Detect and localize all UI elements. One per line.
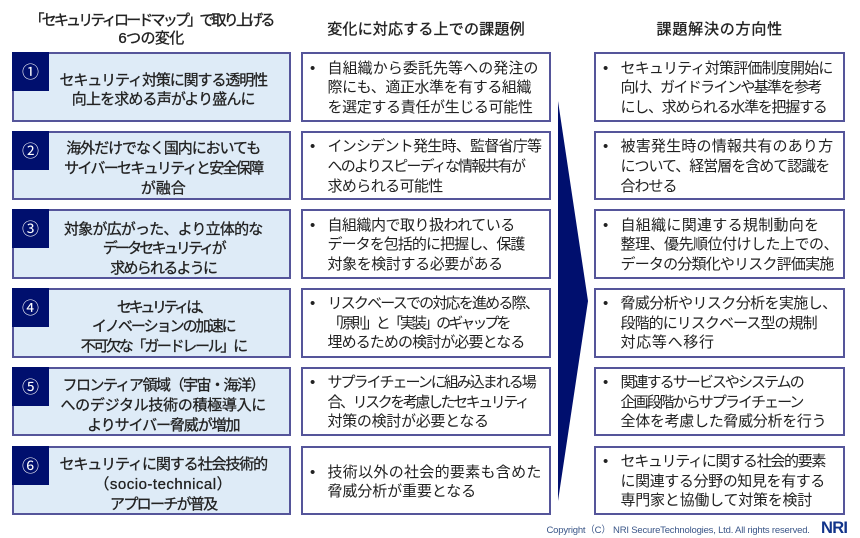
panel: solution 1: • [603, 60, 608, 76]
panel: challenge 2: へのよりスピーディな情報共有が [328, 158, 524, 175]
panel: challenge 4: • [310, 295, 315, 312]
panel: challenge 1: • [310, 60, 315, 76]
heading: solution direction: 課題解決の方向性 [657, 21, 783, 38]
panel: change 4: セキュリティは、 [117, 298, 210, 316]
panel: challenge 1: を選定する責任が生じる可能性 [328, 99, 532, 116]
panel: change 3: 対象が広がった、より立体的な [64, 220, 262, 238]
panel: solution 2: について、経営層を含めて認識を [620, 158, 829, 175]
panel: challenge 4: 「原則」と「実装」のギャップを [328, 315, 509, 332]
panel: challenge 2: 求められる可能性 [328, 178, 443, 195]
panel: solution 5: 企画段階からサプライチェーン [620, 394, 802, 411]
panel: solution 1: にし、求められる水準を把握する [620, 99, 826, 116]
panel: solution 4: • [603, 295, 608, 312]
panel: change 6 [12, 446, 290, 515]
panel: change 4 [12, 288, 290, 358]
panel: solution 5: • [603, 374, 608, 391]
panel: challenge 5: 合、リスクを考慮したセキュリティ [328, 394, 528, 411]
panel: challenge 3: データを包括的に把握し、保護 [328, 236, 524, 253]
panel: solution 4: 脅威分析やリスク分析を実施し、 [620, 295, 837, 312]
arrow: flow to solutions [558, 101, 588, 501]
panel: change 6: アプローチが普及 [110, 496, 216, 513]
panel: solution 5: 全体を考慮した脅威分析を行う [620, 413, 826, 430]
panel: solution 6 [594, 446, 845, 515]
heading: six changes [29, 12, 274, 47]
panel: solution 1 [594, 52, 845, 122]
panel: change 1 [12, 52, 290, 122]
panel: change 3: 求められるように [110, 260, 216, 277]
panel: change 4: 不可欠な「ガードレール」に [81, 338, 246, 355]
panel: solution 6: に関連する分野の知見を有する [620, 473, 825, 490]
heading: challenges: 変化に対応する上での課題例 [327, 21, 525, 38]
panel: change 1: ① [22, 63, 39, 82]
panel: change 3: データセキュリティが [103, 240, 224, 257]
panel: solution 3: • [603, 216, 608, 234]
panel: challenge 6 [301, 446, 551, 515]
panel: change 6: （socio-technical） [94, 476, 232, 493]
panel: solution 4: 段階的にリスクベース型の規制 [620, 315, 817, 332]
panel: challenge 6: 技術以外の社会的要素も含めた [328, 464, 542, 480]
panel: change 4: ④ [22, 299, 39, 318]
panel: challenge 4 [301, 288, 551, 358]
panel: change 2: ② [22, 142, 39, 160]
panel: challenge 2: インシデント発生時、監督省庁等 [328, 138, 541, 155]
panel: solution 2: • [603, 138, 608, 155]
panel: challenge 4: 埋めるための検討が必要となる [328, 334, 524, 351]
panel: change 2: 海外だけでなく国内においても [66, 140, 260, 157]
panel: change 5: よりサイバー脅威が増加 [87, 417, 239, 434]
panel: solution 1: 向け、ガイドラインや基準を参考 [620, 79, 821, 96]
panel: change 4: イノベーションの加速に [92, 318, 235, 335]
panel: solution 3: 自組織に関連する規制動向を [620, 216, 819, 234]
panel: solution 2: 被害発生時の情報共有のあり方 [620, 138, 833, 155]
panel: change 2: サイバーセキュリティと安全保障 [64, 160, 262, 177]
panel: solution 4: 対応等へ移行 [620, 334, 715, 351]
panel: challenge 6: 脅威分析が重要となる [328, 483, 476, 500]
panel: change 5: ⑤ [22, 378, 39, 396]
panel: change 2 [12, 130, 290, 200]
panel: change 1: 向上を求める声がより盛んに [72, 91, 255, 108]
panel: challenge 1: 自組織から委託先等への発注の [328, 60, 538, 76]
panel: challenge 6: • [310, 464, 315, 480]
panel: solution 5: 関連するサービスやシステムの [620, 374, 803, 391]
panel: challenge 5: サプライチェーンに組み込まれる場 [328, 374, 535, 391]
heading: six changes: 6つの変化 [118, 30, 184, 47]
panel: challenge 4: リスクベースでの対応を進める際、 [328, 295, 538, 312]
panel: solution 4 [594, 288, 845, 358]
heading: six changes: 「セキュリティロードマップ」で取り上げる [29, 12, 273, 28]
panel: challenge 1 [301, 52, 551, 122]
panel: challenge 1: 際にも、適正水準を有する組織 [328, 79, 531, 96]
panel: challenge 3: • [310, 216, 315, 234]
panel: solution 6: • [603, 453, 608, 470]
panel: challenge 5: 対策の検討が必要となる [328, 413, 489, 430]
panel: change 2: が融合 [141, 180, 186, 197]
copyright: Copyright（C） NRI SecureTechnologies, Ltd. All rights reserved. [546, 525, 810, 536]
logo: NRI: NRI [821, 518, 847, 536]
panel: change 3 [12, 209, 290, 278]
panel: challenge 3: 自組織内で取り扱われている [328, 216, 515, 234]
panel: solution 6: セキュリティに関する社会的要素 [620, 453, 825, 470]
panel: solution 3 [594, 209, 845, 278]
panel: change 3: ③ [22, 220, 39, 239]
panel: change 5 [12, 366, 290, 436]
panel: challenge 2: • [310, 138, 315, 155]
panel: solution 5 [594, 366, 845, 436]
panel: challenge 2 [301, 130, 551, 200]
panel: change 1: セキュリティ対策に関する透明性 [59, 72, 267, 88]
panel: solution 2 [594, 130, 845, 200]
panel: challenge 3: 対象を検討する必要がある [328, 256, 503, 273]
panel: change 5: フロンティア領域（宇宙・海洋） [62, 377, 264, 394]
panel: solution 6: 専門家と協働して対策を検討 [620, 492, 812, 509]
panel: change 6: セキュリティに関する社会技術的 [59, 456, 267, 473]
panel: challenge 5: • [310, 374, 315, 391]
panel: change 6: ⑥ [22, 456, 39, 476]
panel: solution 2: 合わせる [620, 178, 677, 195]
panel: solution 3: 整理、優先順位付けした上での、 [620, 236, 838, 253]
panel: solution 1: セキュリティ対策評価制度開始に [620, 60, 833, 76]
panel: challenge 5 [301, 366, 551, 436]
panel: change 5: へのデジタル技術の積極導入に [60, 397, 266, 414]
panel: challenge 3 [301, 209, 551, 278]
panel: solution 3: データの分類化やリスク評価実施 [620, 256, 834, 273]
